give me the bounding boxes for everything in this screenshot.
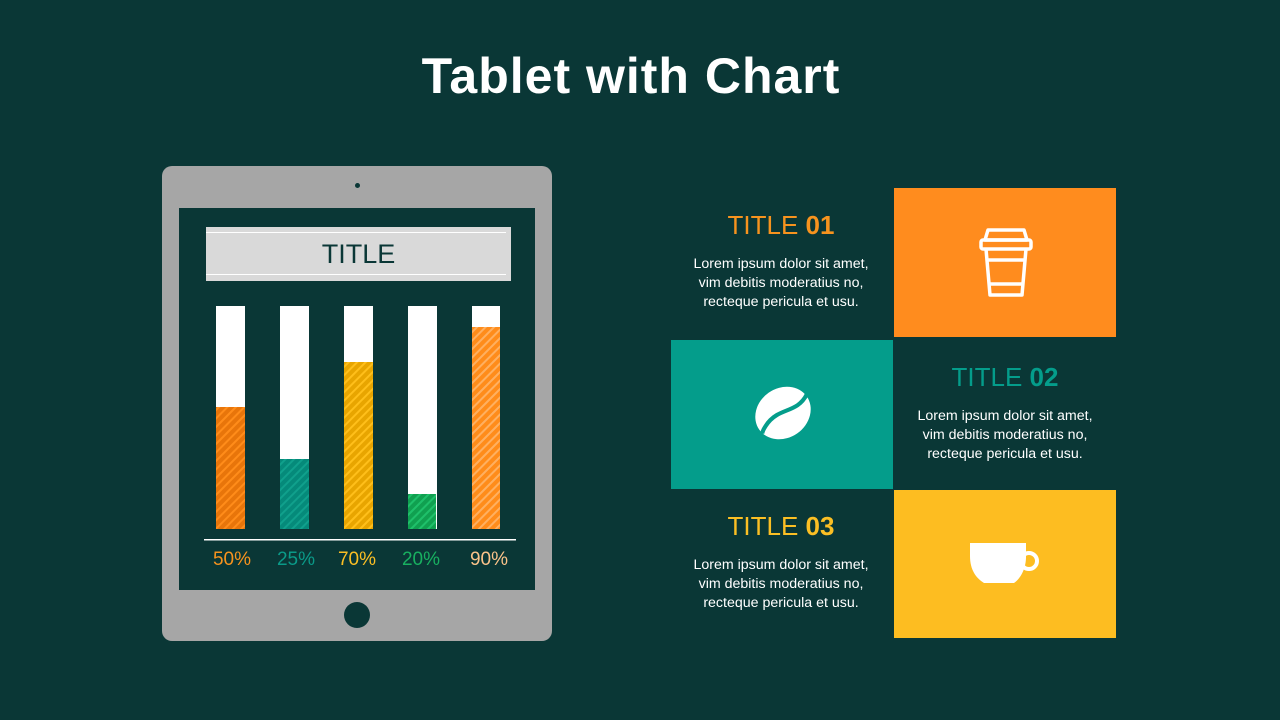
panel: teal icon box bbox=[671, 340, 893, 489]
text: 90% bbox=[470, 549, 508, 570]
screen chart bbox=[179, 208, 535, 590]
title: Tablet with Chart bbox=[422, 48, 840, 104]
panel: yellow icon box bbox=[894, 490, 1116, 638]
icon: coffee bean bbox=[755, 386, 811, 440]
icon: teacup bbox=[970, 543, 1039, 583]
panel: orange icon box bbox=[894, 188, 1116, 337]
icon: coffee cup bbox=[979, 228, 1033, 297]
text block: title 02: Lorem ipsum dolor sit amet, bbox=[917, 408, 1093, 424]
text block: title 03: Lorem ipsum dolor sit amet, bbox=[693, 557, 869, 573]
text block: title 03: TITLE 03 bbox=[728, 511, 834, 541]
text block: title 01: recteque pericula et usu. bbox=[703, 294, 859, 310]
text block: title 01: Lorem ipsum dolor sit amet, bbox=[693, 256, 869, 272]
bar chart bbox=[204, 306, 516, 540]
home button bbox=[344, 602, 370, 628]
percent labels: 50% bbox=[213, 549, 251, 570]
text block: title 03: recteque pericula et usu. bbox=[703, 595, 859, 611]
text: 70% bbox=[338, 549, 376, 570]
tablet bbox=[162, 166, 552, 641]
text block: title 03 bbox=[693, 511, 869, 611]
text block: title 01: vim debitis moderatius no, bbox=[699, 275, 863, 291]
chart title bbox=[206, 227, 511, 281]
text block: title 02 bbox=[917, 362, 1093, 462]
text block: title 01: TITLE 01 bbox=[728, 210, 834, 240]
text block: title 02: recteque pericula et usu. bbox=[927, 446, 1083, 462]
text: 25% bbox=[277, 549, 315, 570]
text block: title 01 bbox=[693, 210, 869, 310]
text block: title 02: TITLE 02 bbox=[952, 362, 1058, 392]
text block: title 02: vim debitis moderatius no, bbox=[923, 427, 1087, 443]
chart title: TITLE bbox=[322, 239, 395, 269]
text: 20% bbox=[402, 549, 440, 570]
text block: title 03: vim debitis moderatius no, bbox=[699, 576, 863, 592]
camera bbox=[355, 183, 360, 188]
